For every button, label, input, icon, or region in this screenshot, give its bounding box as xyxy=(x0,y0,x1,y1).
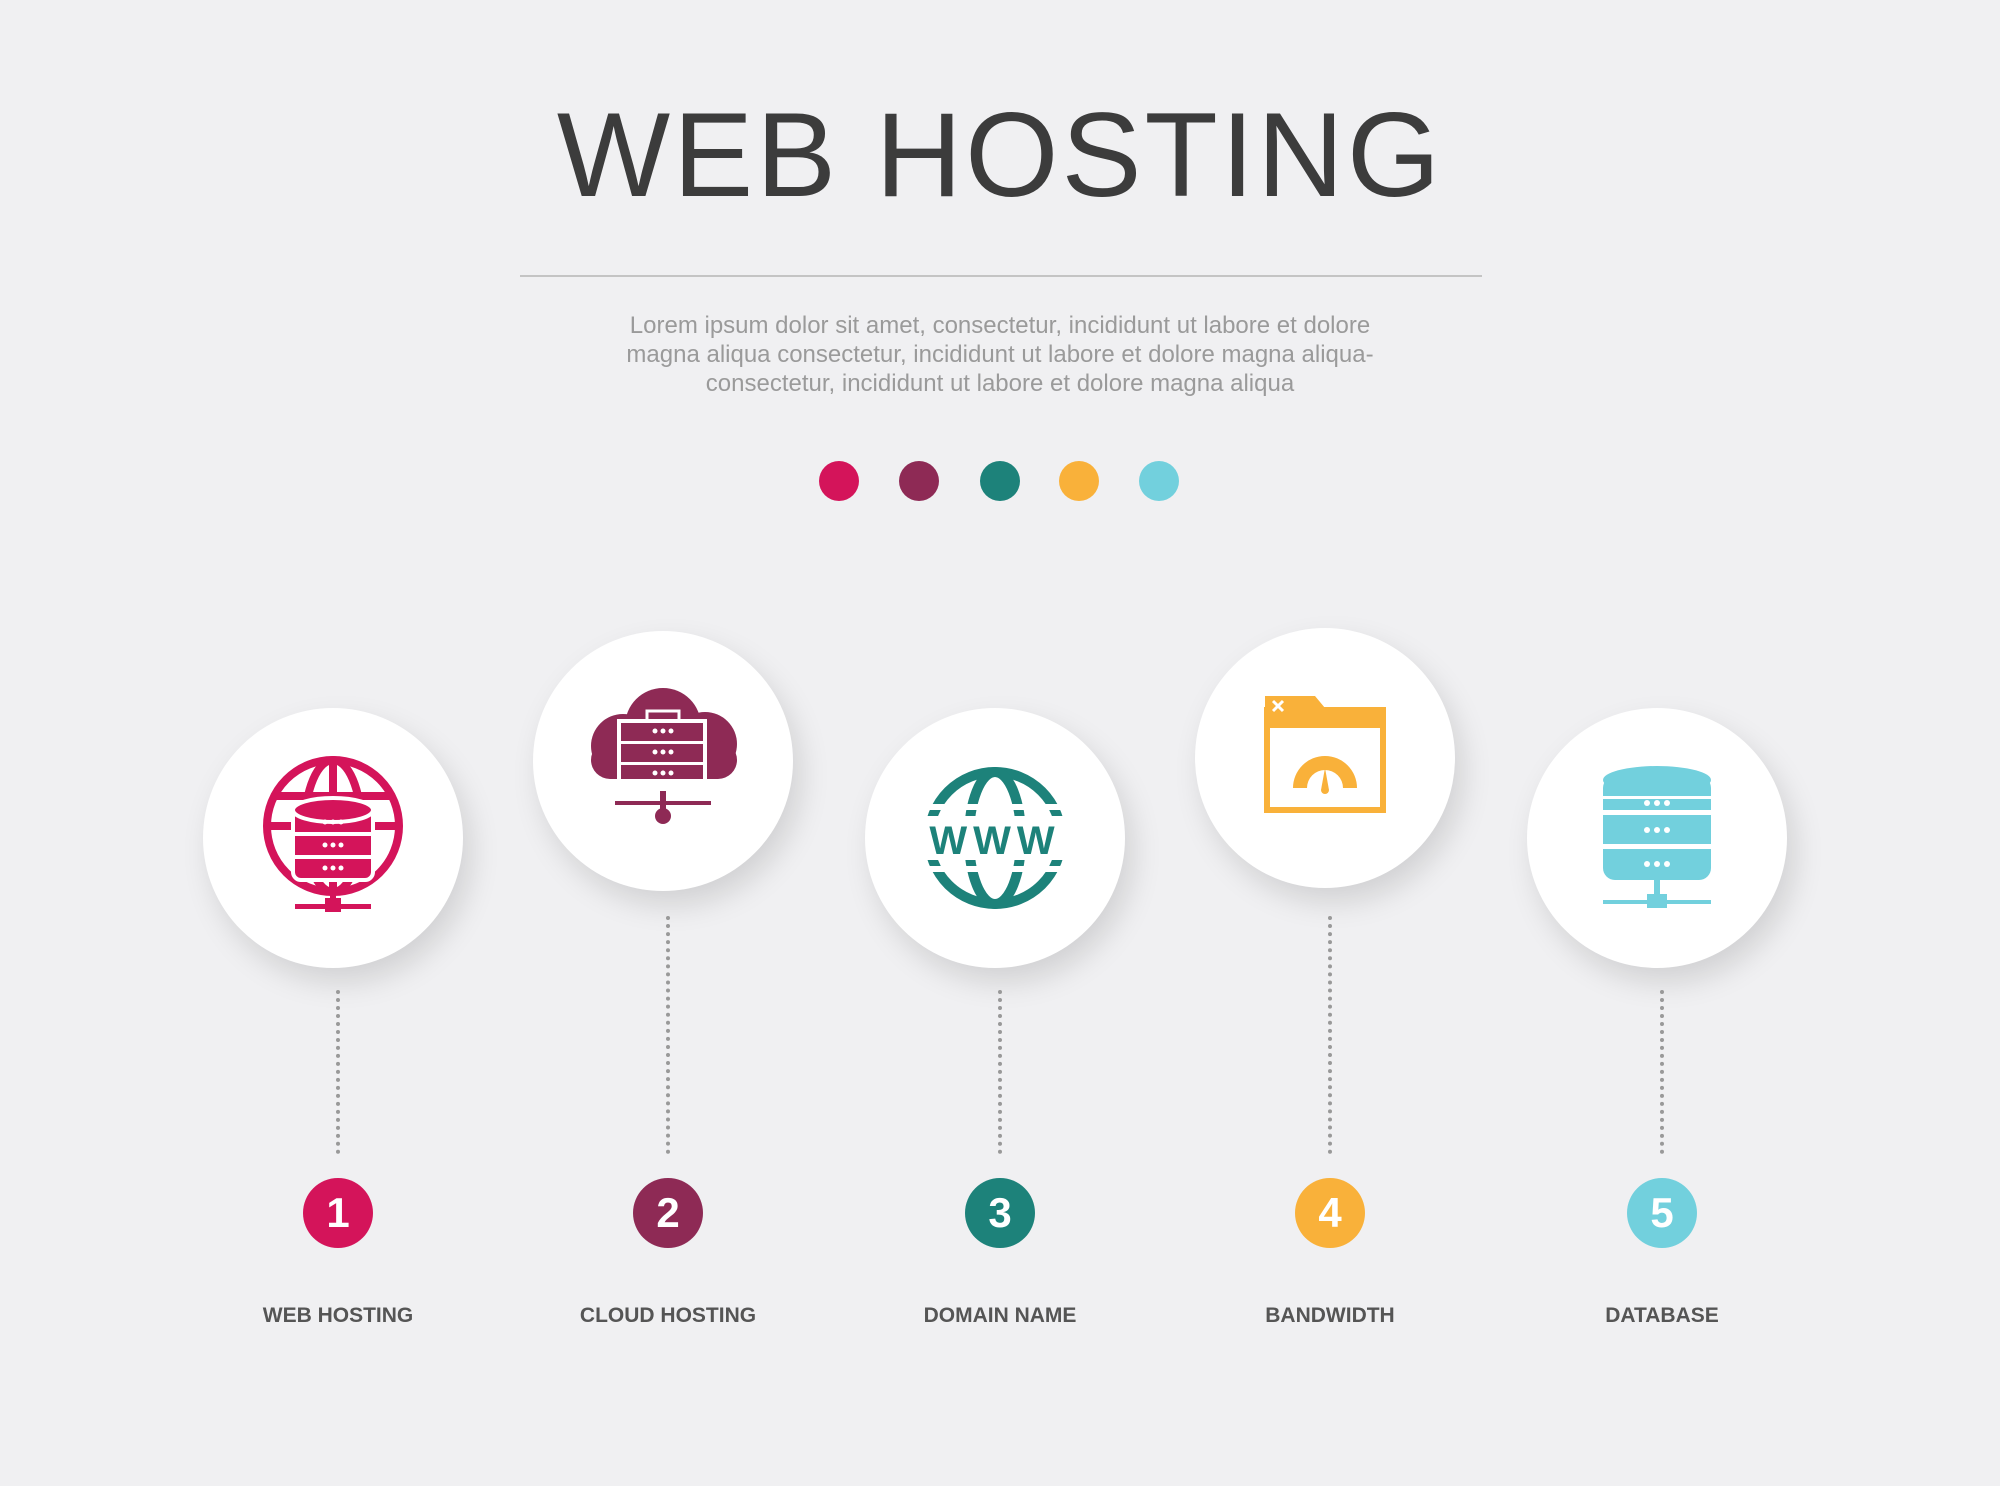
icon circle 4 xyxy=(1195,628,1455,888)
number 2 xyxy=(633,1178,703,1248)
title: WEB HOSTING xyxy=(557,88,1443,222)
number 1 xyxy=(303,1178,373,1248)
icon circle 3 xyxy=(865,708,1125,968)
step 4: bandwidth xyxy=(1194,628,1472,1327)
step 1: web hosting xyxy=(202,708,480,1327)
step 2: cloud hosting xyxy=(532,631,810,1327)
number 2: 2 xyxy=(656,1189,680,1236)
icon circle 1 xyxy=(203,708,463,968)
icon circle 2 xyxy=(533,631,793,891)
number 3 xyxy=(965,1178,1035,1248)
description text: magna aliqua consectetur, incididunt ut labore et dolore magna aliqua- xyxy=(626,341,1374,368)
number 4: 4 xyxy=(1318,1189,1342,1236)
label 2: CLOUD HOSTING xyxy=(580,1304,756,1327)
description text xyxy=(626,312,1374,397)
icon circle 5 xyxy=(1527,708,1787,968)
label 1: WEB HOSTING xyxy=(263,1304,413,1327)
number 1: 1 xyxy=(326,1189,350,1236)
number 3: 3 xyxy=(988,1189,1012,1236)
number 4 xyxy=(1295,1178,1365,1248)
step 3: domain name xyxy=(864,708,1142,1327)
colour dots xyxy=(819,461,1179,501)
label 5: DATABASE xyxy=(1605,1304,1719,1327)
label 4: BANDWIDTH xyxy=(1265,1304,1395,1327)
number 5 xyxy=(1627,1178,1697,1248)
description text: consectetur, incididunt ut labore et dolore magna aliqua xyxy=(706,370,1294,397)
step 5: database xyxy=(1526,708,1804,1327)
icon circle 3: WWW xyxy=(929,819,1061,863)
number 5: 5 xyxy=(1650,1189,1674,1236)
description text: Lorem ipsum dolor sit amet, consectetur, incididunt ut labore et dolore xyxy=(630,312,1370,339)
label 3: DOMAIN NAME xyxy=(924,1304,1076,1327)
